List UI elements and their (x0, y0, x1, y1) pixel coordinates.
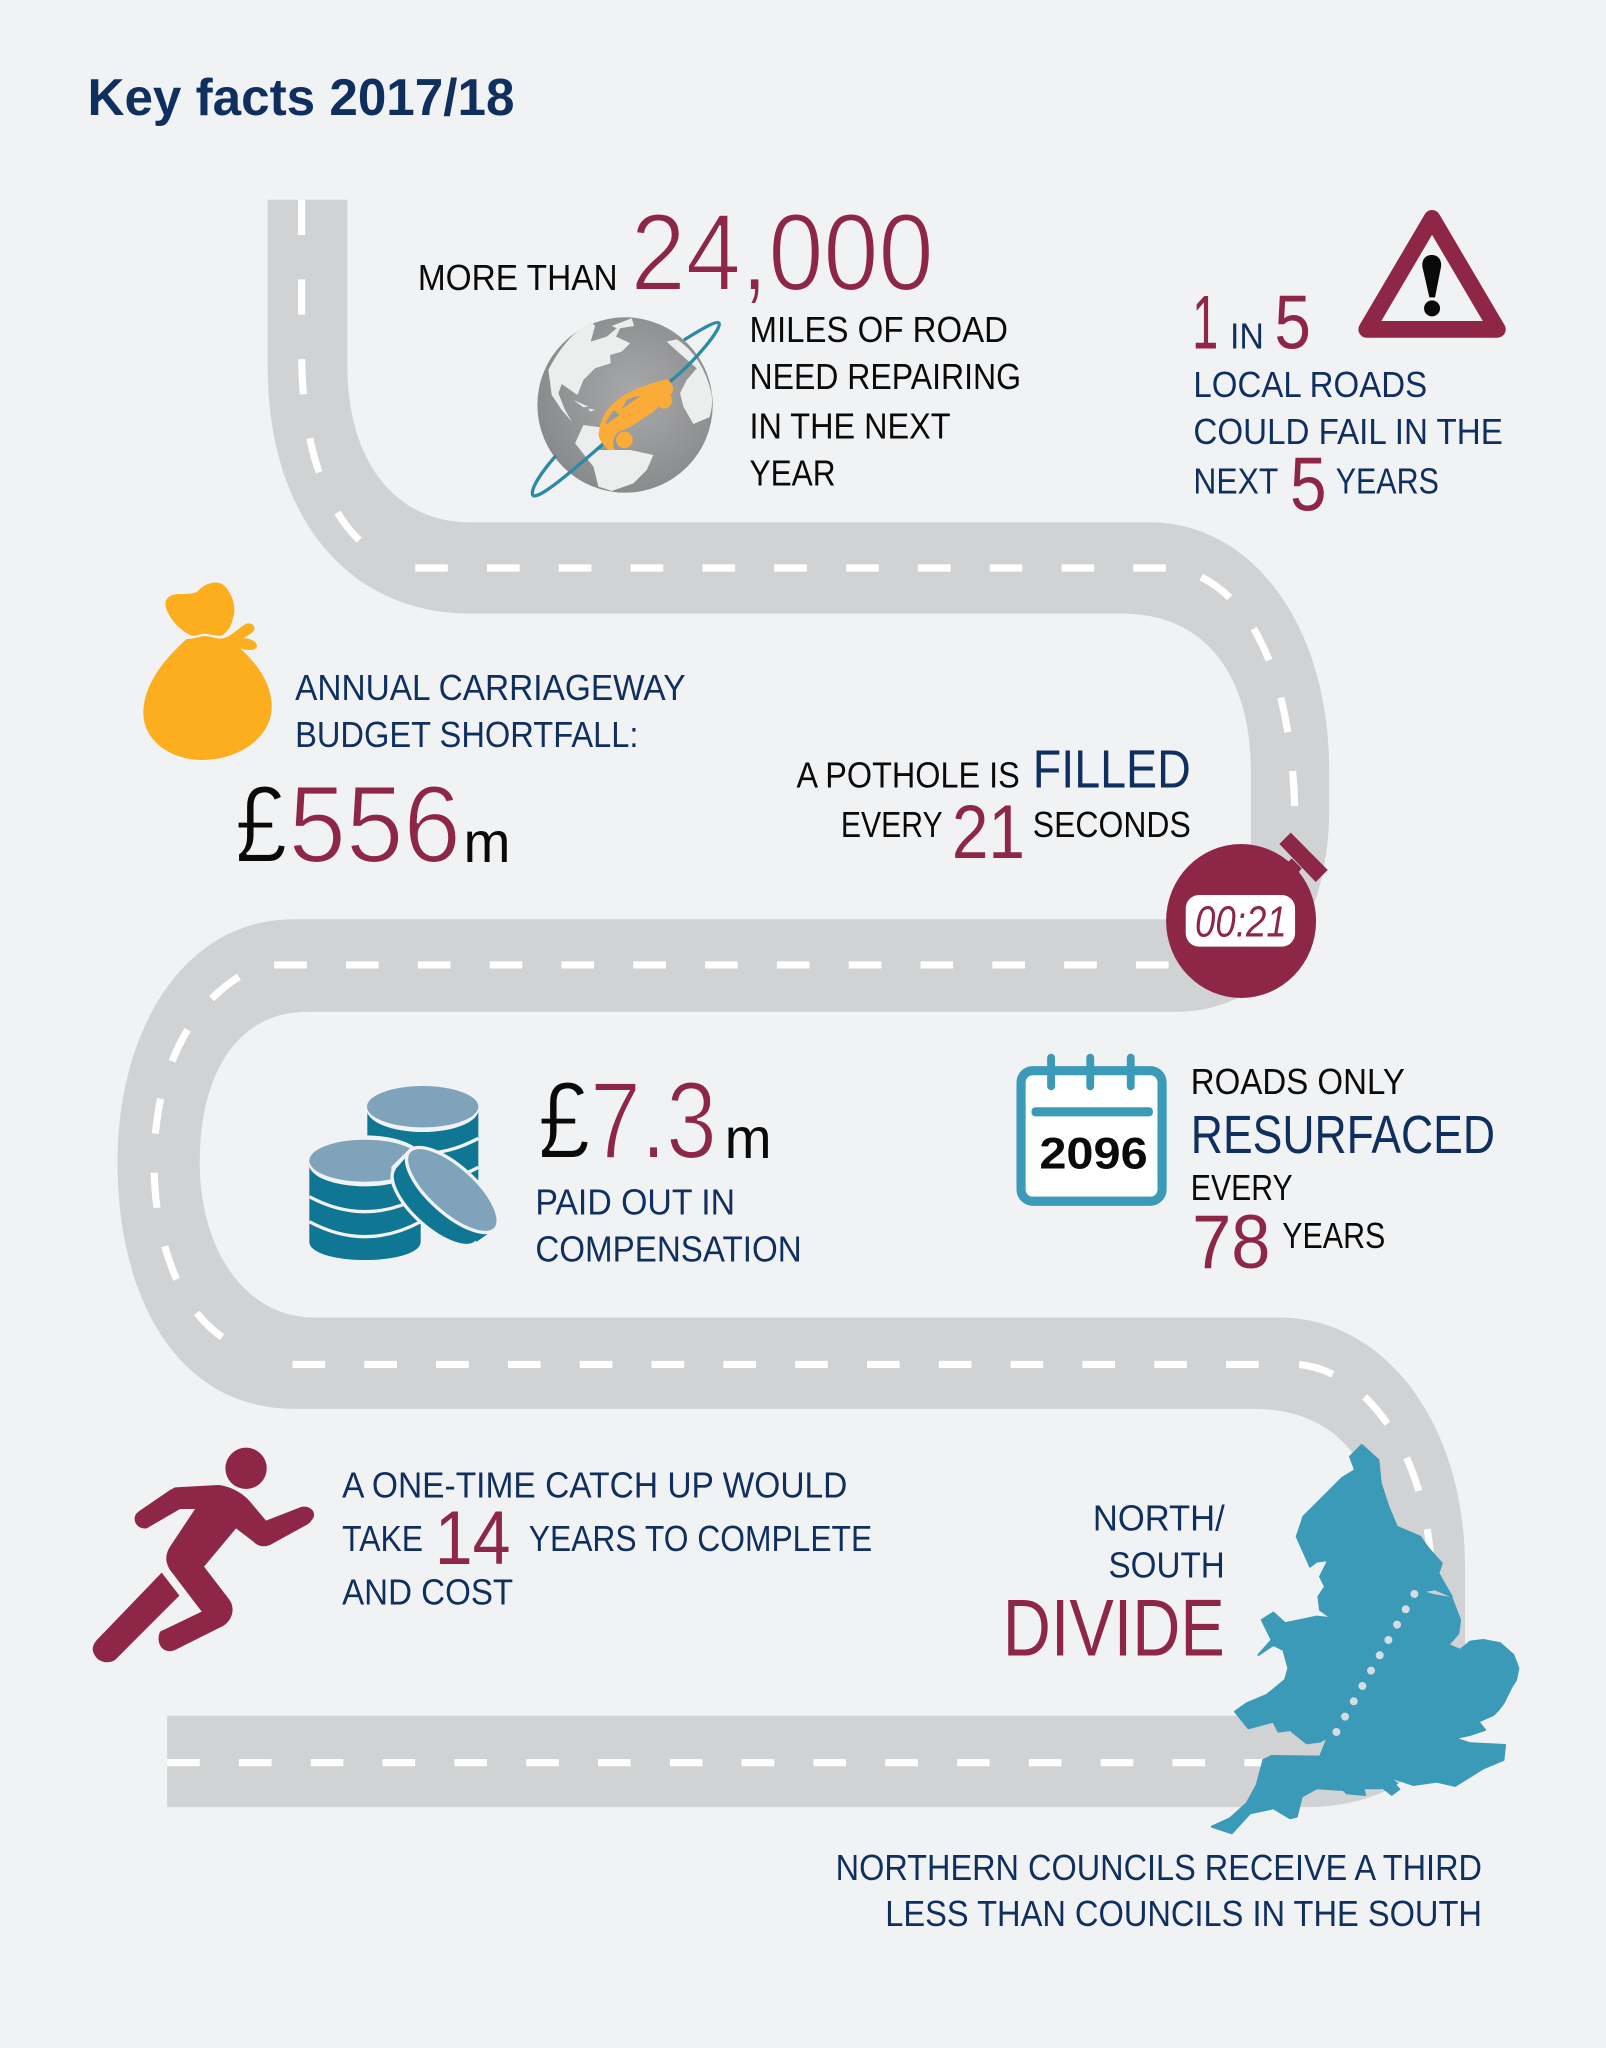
stat: compensation (535, 1060, 802, 1269)
stat: catch up: AND COST (342, 1572, 513, 1613)
icon: globe with car (532, 317, 719, 496)
icon: calendar (1021, 1058, 1162, 1201)
stat: 1 in 5 local roads: 1 (1192, 281, 1218, 366)
stat: 24,000 miles of road: MORE THAN (418, 257, 618, 298)
stat: 24,000 miles of road: NEED REPAIRING (749, 356, 1021, 397)
stat: catch up: A ONE-TIME CATCH UP WOULD (342, 1465, 847, 1506)
stat: 24,000 miles of road: YEAR (749, 453, 836, 494)
stat: compensation: £ (538, 1060, 590, 1182)
stat: catch up (342, 1465, 872, 1613)
stat: pothole filled: SECONDS (1033, 804, 1191, 845)
stat: compensation: m (725, 1107, 772, 1171)
icon: runner (93, 1448, 314, 1662)
stat: pothole filled: EVERY (841, 804, 943, 845)
stat: north/south divide (1003, 1497, 1226, 1674)
stat: 1 in 5 local roads: 5 (1274, 281, 1311, 366)
stat: budget shortfall (235, 667, 685, 886)
map: England and Wales (1212, 1445, 1518, 1833)
stat: budget shortfall: 556 (289, 764, 461, 886)
stat: budget shortfall: £ (235, 764, 287, 886)
road (118, 200, 1465, 1807)
icon: money bag (143, 583, 272, 760)
stat: pothole filled: 21 (952, 790, 1025, 875)
stat: 1 in 5 local roads: YEARS (1336, 461, 1439, 502)
stat: 24,000 miles of road (418, 192, 1021, 494)
stat: roads resurfaced: YEARS (1282, 1215, 1385, 1256)
icon: stopwatch (1166, 833, 1328, 998)
stat: roads resurfaced: EVERY (1191, 1167, 1293, 1208)
icon: warning triangle (1367, 218, 1497, 329)
stat: compensation: PAID OUT IN (535, 1181, 735, 1222)
stat: budget shortfall: ANNUAL CARRIAGEWAY (295, 667, 685, 708)
stat: 1 in 5 local roads: IN (1230, 316, 1264, 357)
stat: catch up: 14 (435, 1496, 511, 1581)
stat: pothole filled: FILLED (1033, 740, 1191, 799)
stat: budget shortfall: m (464, 811, 511, 875)
stat: roads resurfaced: RESURFACED (1191, 1106, 1495, 1165)
stat: compensation: COMPENSATION (535, 1228, 802, 1269)
stat: 1 in 5 local roads (1192, 281, 1503, 528)
stat: roads resurfaced: ROADS ONLY (1191, 1061, 1405, 1102)
icon: calendar: 2096 (1039, 1130, 1148, 1179)
stat: 1 in 5 local roads: NEXT (1193, 461, 1278, 502)
stat: 1 in 5 local roads: 5 (1290, 443, 1327, 528)
icon: stopwatch: 00:21 (1195, 899, 1287, 947)
stat: budget shortfall: BUDGET SHORTFALL: (295, 714, 638, 755)
stat: roads resurfaced: 78 (1192, 1200, 1270, 1285)
stat: north/south divide: SOUTH (1109, 1544, 1225, 1585)
stat: 24,000 miles of road: MILES OF ROAD (749, 309, 1008, 350)
stat: catch up: TAKE (342, 1518, 423, 1559)
stat: 1 in 5 local roads: LOCAL ROADS (1193, 364, 1427, 405)
stat: compensation: 7.3 (590, 1060, 717, 1182)
caption: northern councils (836, 1847, 1482, 1934)
title: Key facts 2017/18 (87, 69, 514, 127)
stat: north/south divide: DIVIDE (1003, 1584, 1225, 1674)
caption: northern councils: LESS THAN COUNCILS IN THE SOUTH (885, 1893, 1482, 1934)
stat: 1 in 5 local roads: COULD FAIL IN THE (1193, 411, 1503, 452)
stat: catch up: YEARS TO COMPLETE (529, 1518, 872, 1559)
stat: north/south divide: NORTH/ (1093, 1497, 1226, 1538)
caption: northern councils: NORTHERN COUNCILS RECEIVE A THIRD (836, 1847, 1482, 1888)
stat: 24,000 miles of road: IN THE NEXT (749, 406, 951, 447)
stat: roads resurfaced (1191, 1061, 1495, 1285)
stat: 24,000 miles of road: 24,000 (631, 192, 934, 314)
stat: pothole filled: A POTHOLE IS (796, 754, 1020, 795)
icon: coins (306, 1086, 511, 1260)
stat: pothole filled (796, 740, 1191, 875)
